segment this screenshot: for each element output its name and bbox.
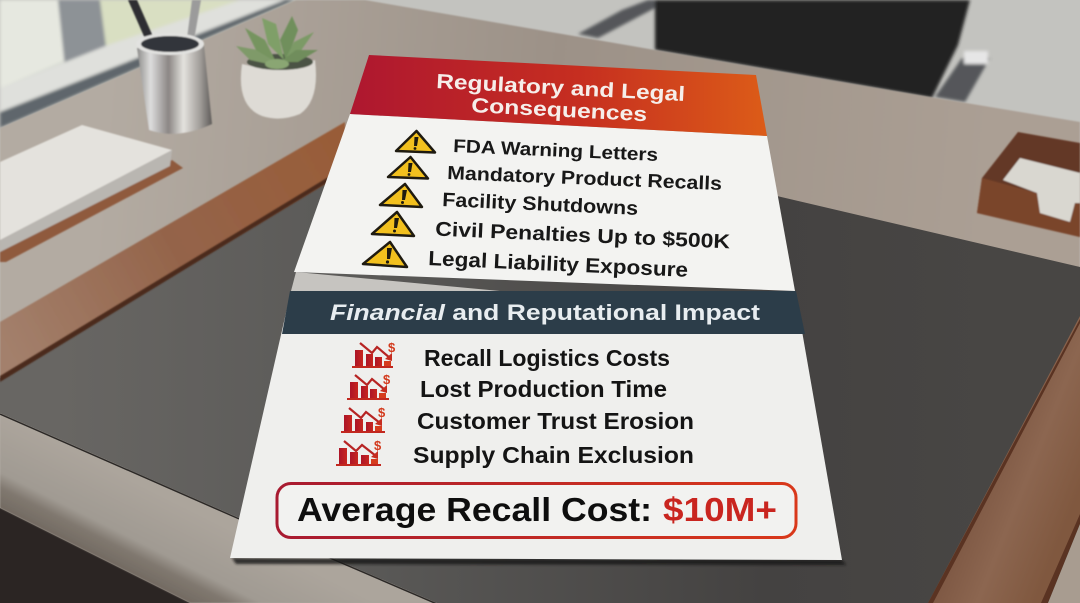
list item: civil penalties up to $500K — [372, 212, 731, 253]
callout: average recall cost — [277, 484, 796, 538]
icon: falling bar chart — [347, 372, 391, 400]
icon: warning triangle — [372, 212, 414, 236]
lower sheet shadow — [232, 558, 846, 565]
list item: lost production time — [347, 372, 667, 402]
heading band: regulatory and legal consequences — [350, 55, 767, 136]
icon: falling bar chart: $ — [383, 372, 391, 387]
panel: financial and reputational impact — [230, 272, 842, 560]
icon: falling bar chart — [336, 438, 382, 466]
icon: leather note tray — [977, 132, 1080, 237]
icon: warning triangle — [363, 242, 407, 267]
icon: succulent plant — [236, 16, 318, 119]
list item: supply chain exclusion: Supply Chain Exclusion — [413, 442, 694, 468]
icon: warning triangle — [396, 131, 435, 152]
list item: facility shutdowns — [380, 184, 639, 220]
icon: falling bar chart — [341, 405, 386, 433]
list item: supply chain exclusion — [336, 438, 694, 468]
under-edge shadow of the upper sheet — [291, 272, 500, 291]
background: desk front wood — [0, 412, 440, 603]
callout: average recall cost: Average Recall Cost: — [297, 492, 652, 529]
icon: notebook — [0, 125, 183, 262]
list item: legal liability exposure — [363, 242, 689, 282]
icon: falling bar chart: $ — [378, 405, 386, 420]
list item: facility shutdowns: Facility Shutdowns — [442, 189, 639, 220]
heading band: regulatory and legal consequences: Regulatory and Legal — [436, 70, 686, 106]
list item: recall logistics costs — [352, 340, 670, 371]
background: left leather strap — [0, 122, 345, 382]
list item: FDA warning letters: FDA Warning Letters — [453, 135, 659, 165]
heading band: regulatory and legal consequences: Consequences — [471, 94, 648, 126]
background: pad front edge — [0, 414, 437, 603]
list item: civil penalties up to $500K: Civil Penalties Up to $500K — [435, 219, 731, 253]
background: chair — [578, 0, 990, 102]
list item: customer trust erosion — [341, 405, 694, 434]
list item: recall logistics costs: Recall Logistics Costs — [424, 345, 670, 371]
background: right wood corner — [1048, 524, 1080, 603]
callout: average recall cost: $10M+ — [663, 492, 777, 529]
background: window — [0, 0, 300, 128]
heading band: financial and reputational impact: Financial and Reputational Impact — [330, 300, 761, 325]
background: right leather strap — [928, 316, 1080, 603]
list item: lost production time: Lost Production Time — [420, 376, 667, 402]
list item: mandatory product recalls: Mandatory Product Recalls — [447, 163, 722, 195]
icon: falling bar chart — [352, 340, 396, 368]
list item: customer trust erosion: Customer Trust Erosion — [417, 408, 694, 434]
background: dark under desk — [0, 508, 190, 603]
list item: legal liability exposure: Legal Liability Exposure — [428, 247, 689, 282]
background: dark desk pad — [0, 160, 1080, 603]
icon: warning triangle — [388, 157, 428, 178]
icon: falling bar chart: $ — [374, 438, 382, 453]
panel: regulatory and legal consequences — [294, 55, 795, 291]
heading band: financial and reputational impact — [282, 291, 805, 334]
icon: falling bar chart: $ — [388, 340, 396, 355]
icon: warning triangle — [380, 184, 422, 207]
list item: FDA warning letters — [396, 131, 659, 165]
list item: mandatory product recalls — [388, 157, 722, 195]
icon: pen cup — [128, 0, 212, 134]
